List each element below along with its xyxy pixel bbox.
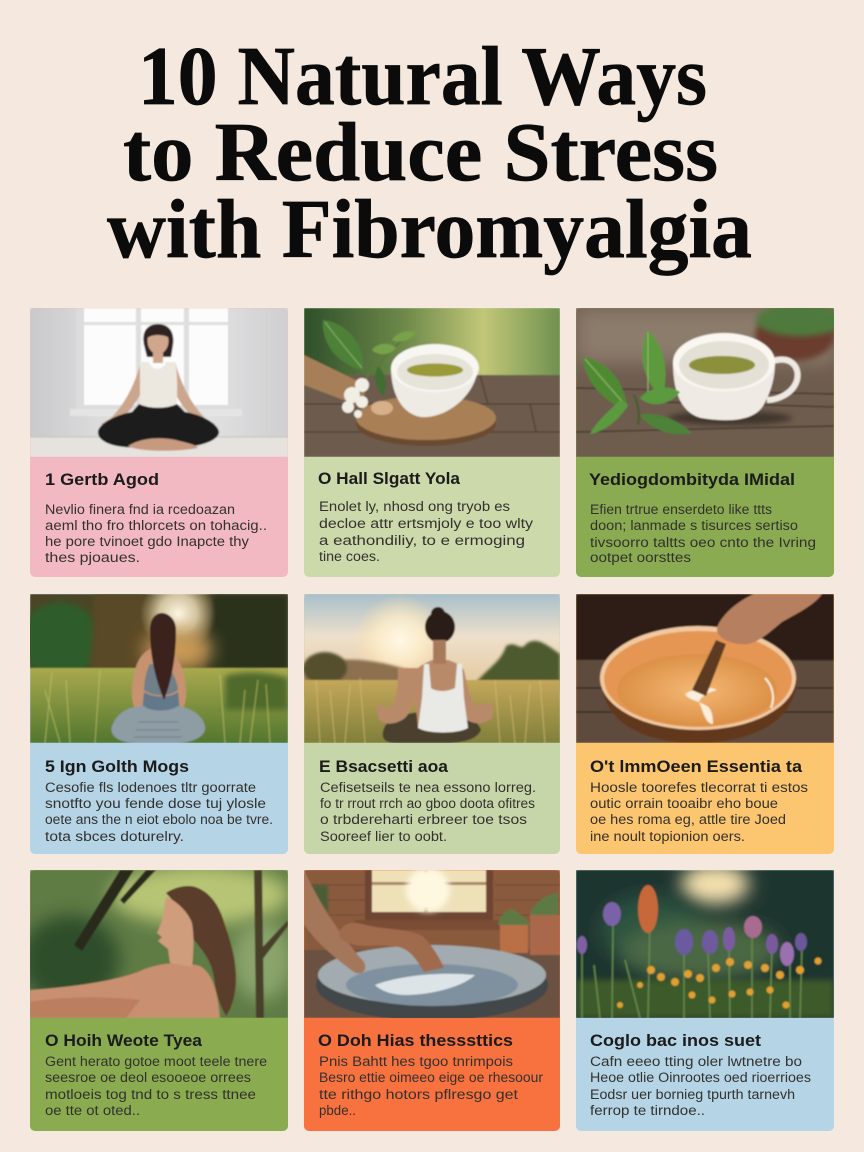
heading: Coglo bac inos suet (590, 1032, 762, 1050)
body text: ootpet oorsttes (590, 550, 691, 565)
image: wildflowers at dusk (576, 864, 834, 1018)
panel: card 8 coral (304, 868, 560, 1131)
panel: card 6 orange (576, 594, 834, 854)
image: woman sitting in a meadow from behind (30, 594, 288, 743)
body text: ferrop te tirndoe.. (590, 1103, 705, 1118)
body text: aeml tho fro thlorcets on tohacig.. (45, 518, 267, 533)
body text: doon; lanmade s tisurces sertiso (590, 518, 798, 533)
heading: 1 Gertb Agod (45, 471, 159, 489)
body text (590, 1054, 811, 1118)
image: woman stretching among trees (20, 865, 292, 1018)
body text (319, 1054, 544, 1118)
image: hand stirring a warm bowl (576, 594, 834, 743)
body text: o trbdereharti erbreer toe tsos (320, 812, 527, 827)
panel: card 3 green (576, 304, 844, 577)
image: hand in a warm water tub (304, 868, 560, 1021)
body text: Sooreef lier to oobt. (320, 829, 447, 844)
heading: Yediogdombityda IMidal (589, 471, 795, 489)
body text (590, 502, 816, 565)
image: tea cup on a wooden board (304, 308, 560, 457)
image: woman meditating in a white room (30, 308, 288, 457)
heading: 5 Ign Golth Mogs (45, 758, 189, 776)
body text (320, 780, 536, 844)
panel: card 2 light green (304, 308, 560, 577)
body text (45, 780, 273, 844)
panel: card 9 light blue (576, 864, 834, 1131)
body text: tivsoorro taltts oeo cnto the Ivring (590, 535, 816, 550)
body text: a eathondiliy, to e ermoging (319, 533, 525, 548)
body text: tine coes. (319, 549, 380, 564)
title: with Fibromyalgia (107, 183, 752, 276)
body text: seesroe oe deol esooeoe orrees (45, 1070, 251, 1085)
heading: O Hall Slgatt Yola (318, 470, 461, 488)
body text (45, 502, 267, 565)
body text: Besro ettie oimeeo eige oe rhesoour (319, 1070, 544, 1085)
body text: ine noult topionion oers. (590, 829, 745, 844)
body text: tte rithgo hotors pflresgo get (319, 1087, 518, 1102)
body text: fo tr rrout rrch ao gboo doota ofitres (320, 796, 535, 811)
panel: card 1 pink (30, 308, 288, 577)
title (107, 30, 752, 276)
panel: card 5 sage (303, 594, 560, 854)
body text: pbde.. (319, 1103, 356, 1118)
body text: Cafn eeeo tting oler lwtnetre bo (590, 1054, 802, 1069)
body text: Cefisetseils te nea essono lorreg. (320, 780, 536, 795)
panel: card 4 blue (20, 576, 288, 854)
body text (45, 1054, 267, 1118)
panel: card 7 green (20, 865, 292, 1131)
body text: outic orrain tooaibr eho boue (590, 796, 778, 811)
body text: Hoosle toorefes tlecorrat ti estos (590, 780, 808, 795)
body text (590, 780, 808, 844)
body text: Eodsr uer bornieg tpurth tarnevh (590, 1087, 795, 1102)
body text: Cesofie fls lodenoes tltr goorrate (45, 780, 256, 795)
body text: oe hes roma eg, attle tire Joed (590, 812, 786, 827)
body text: he pore tvinoet gdo Inapcte thy (45, 534, 249, 549)
body text: tota sbces doturelry. (45, 829, 184, 844)
heading: O Doh Hias thesssttics (318, 1032, 513, 1050)
body text: Enolet ly, nhosd ong tryob es (319, 499, 510, 514)
body text: Nevlio finera fnd ia rcedoazan (45, 502, 235, 517)
body text: Heoe otlie Oinrootes oed rioerrioes (590, 1070, 811, 1085)
body text: snotfto you fende dose tuj ylosle (45, 796, 266, 811)
title: to Reduce Stress (123, 106, 718, 199)
image: woman meditating in a field at sunset (303, 594, 560, 743)
body text (319, 499, 533, 564)
heading: E Bsacsetti aoa (319, 758, 449, 776)
body text: thes pjoaues. (45, 550, 140, 565)
body text: decloe attr ertsmjoly e too wlty (319, 516, 533, 531)
image: tea cup with green leaves (576, 304, 844, 457)
body text: Efien trtrue enserdeto like ttts (590, 502, 772, 517)
heading: O Hoih Weote Tyea (45, 1032, 203, 1050)
heading: O't lmmOeen Essentia ta (590, 758, 803, 776)
body text: Pnis Bahtt hes tgoo tnrimpois (319, 1054, 513, 1069)
title: 10 Natural Ways (138, 30, 707, 123)
body text: Gent herato gotoe moot teele tnere (45, 1054, 267, 1069)
body text: motloeis tog tnd to s tress ttnee (45, 1087, 256, 1102)
body text: oe tte ot oted.. (45, 1103, 140, 1118)
body text: oete ans the n eiot ebolo noa be tvre. (45, 812, 273, 827)
